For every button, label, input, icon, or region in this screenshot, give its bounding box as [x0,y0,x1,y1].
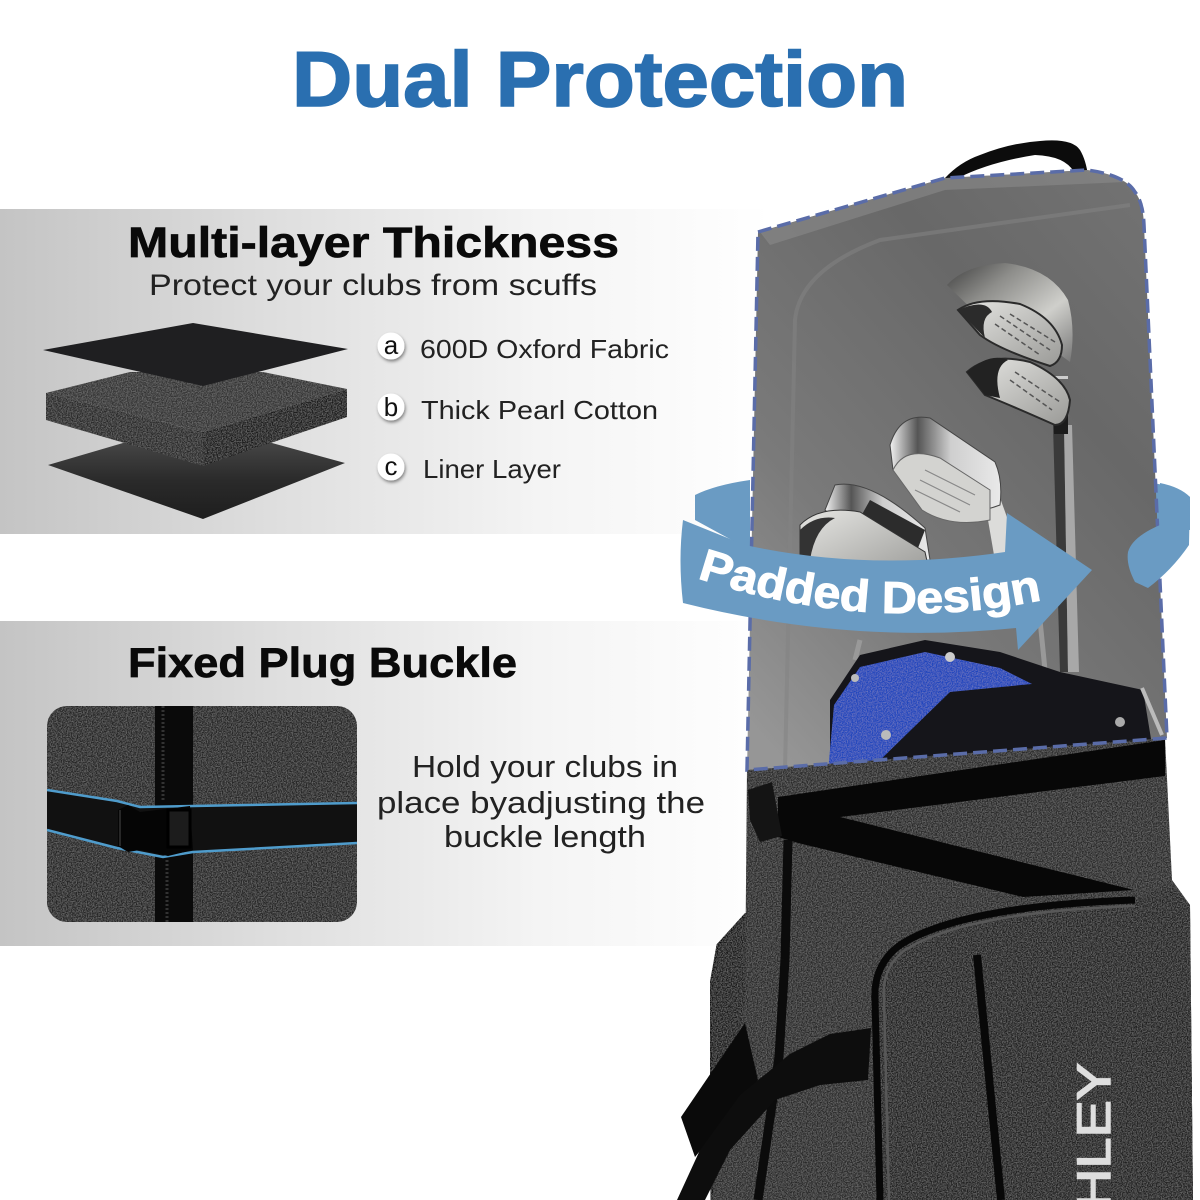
illustration: golf travel bag [677,140,1193,1200]
panel: multi-layer thickness background [0,209,770,534]
icon: material layers stack [43,323,348,519]
text: buckle description: place byadjusting the [377,785,705,820]
arrow label: Padded Design [700,548,1040,618]
label b: Thick Pearl Cotton [378,392,658,425]
top rim highlight [760,170,1125,245]
front pocket panel [875,886,1193,1200]
subheading: protect your clubs: Protect your clubs from scuffs [149,269,597,302]
legend: fabric layers [378,330,669,484]
arrow: rear band [695,480,1190,550]
blue golf bag top [828,640,1162,775]
text: buckle description: buckle length [444,819,646,854]
text: buckle description: Hold your clubs in [412,749,678,784]
label c: Liner Layer: c [384,451,398,481]
arrow return blob [1128,483,1190,588]
bag body [712,738,1193,1200]
carry straps [681,1023,758,1157]
compression straps [778,740,1165,897]
label a: 600D Oxford Fabric: 600D Oxford Fabric [420,334,669,364]
dashed outline [747,170,1167,770]
panel: padded interior cutaway [747,170,1167,775]
inner seam [785,205,1130,770]
label a: 600D Oxford Fabric: a [384,330,399,360]
strap buckle [748,782,782,842]
zipper lines [758,840,1135,1200]
label b: Thick Pearl Cotton: b [384,392,398,422]
lower club shafts [855,620,1045,670]
iron clubs [800,416,1007,560]
bag handle [945,140,1088,178]
label b: Thick Pearl Cotton: Thick Pearl Cotton [421,395,658,425]
label c: Liner Layer [378,451,561,484]
photo: buckle close-up [47,706,357,922]
label c: Liner Layer: Liner Layer [423,454,561,484]
bag side pocket [710,913,760,1200]
driver and woods [947,263,1079,672]
heading: fixed plug buckle: Fixed Plug Buckle [128,639,517,686]
title: Dual Protection [292,35,908,123]
arrow body [680,513,1092,650]
text: buckle description [377,749,705,854]
panel: fixed plug buckle background [0,621,770,946]
arrow: padded design wrap-around [680,483,1190,650]
label a: 600D Oxford Fabric [378,330,669,364]
heading: multi-layer thickness: Multi-layer Thickness [128,219,619,267]
